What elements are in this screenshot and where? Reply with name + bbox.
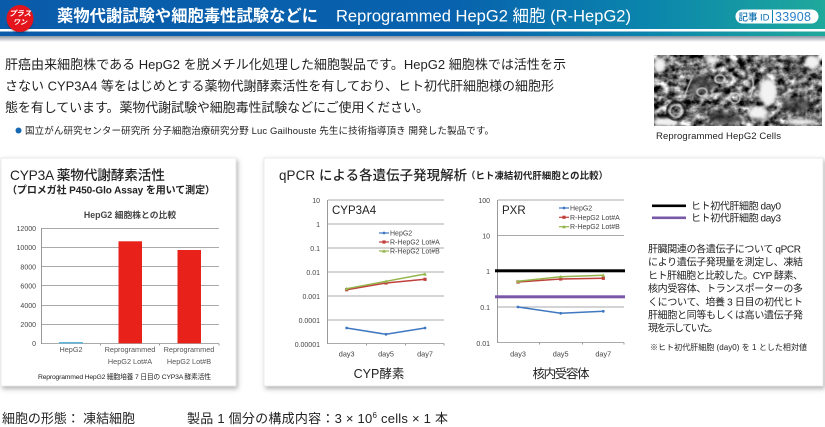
series: Lot A: [518, 278, 603, 282]
explanatory paragraph: 現を示していた。: [648, 323, 718, 335]
line chart: PXR: 10: [482, 234, 490, 240]
line chart: CYP3A4: day5: [378, 350, 394, 358]
bar chart: HepG2 Lot#A: [108, 357, 152, 366]
english title: Reprogrammed HepG2 細胞 (R-HepG2): [336, 6, 631, 26]
line chart: PXR: 0.01: [476, 341, 490, 348]
series: Lot B: [347, 274, 425, 289]
panel subheading: （プロメガ社 P450-Glo Assay を用いて測定）: [7, 184, 215, 196]
reference line: day0: [495, 269, 625, 272]
line chart: PXR: 0.1: [480, 305, 490, 312]
cell form spec: 細胞の形態： 凍結細胞: [2, 411, 135, 426]
legend: HepG2: [390, 230, 412, 238]
line chart: PXR: [476, 198, 625, 381]
article id badge: [736, 10, 818, 24]
bar chart: 8000: [20, 264, 36, 272]
explanatory paragraph: [648, 242, 803, 335]
chart label: CYP3A4: [332, 205, 377, 217]
explanatory paragraph: により遺伝子発現量を測定し、凍結: [648, 256, 803, 269]
bar chart: [17, 209, 219, 366]
intro text: [5, 57, 566, 115]
acknowledgement note: 国立がん研究センター研究所 分子細胞治療研究分野 Luc Gailhouste 先生に技術指導頂き 開発した製品です。: [25, 125, 494, 137]
line chart: PXR: 1: [486, 269, 490, 276]
article id badge: 33908: [775, 10, 811, 24]
explanatory paragraph: くについて、培養 3 日目の初代ヒト: [648, 295, 803, 308]
explanatory paragraph: 肝細胞と同等もしくは高い遺伝子発: [648, 308, 803, 322]
chart title: HepG2 細胞株との比較: [84, 209, 176, 220]
explanatory paragraph: 肝臓関連の各遺伝子について qPCR: [648, 242, 801, 256]
article id badge: 記事 ID: [738, 12, 770, 24]
product contents spec: 製品 1 個分の構成内容：3 × 10: [187, 411, 372, 426]
series: HepG2: [347, 328, 425, 334]
line chart: CYP3A4: 0.0001: [299, 318, 320, 325]
series: HepG2: [518, 307, 603, 313]
reference legend: [652, 200, 781, 224]
bar chart: 0: [32, 341, 36, 348]
chart label: PXR: [502, 205, 526, 217]
bar chart: 4000: [20, 303, 36, 310]
explanatory paragraph: 核内受容体、トランスポーターの多: [648, 282, 803, 295]
legend: R-HepG2 Lot#B: [390, 248, 440, 256]
header banner: [0, 0, 825, 42]
panel heading: qPCR による各遺伝子発現解析: [279, 167, 467, 183]
line chart: CYP3A4: 0.1: [310, 246, 320, 253]
photo caption: Reprogrammed HepG2 Cells: [656, 131, 781, 142]
title: 薬物代謝試験や細胞毒性試験などに: [57, 6, 318, 26]
bar chart: Reprogrammed: [164, 345, 214, 354]
bar chart: 10000: [17, 245, 36, 252]
bar chart: HepG2: [59, 345, 83, 354]
cell photograph: [653, 55, 822, 126]
line chart: CYP3A4: 0.001: [302, 294, 320, 301]
explanatory paragraph: ヒト肝細胞と比較した。CYP 酵素、: [648, 269, 803, 282]
reference legend: ヒト初代肝細胞 day3: [691, 212, 781, 224]
reference line: day3: [495, 295, 625, 298]
bar chart: HepG2 Lot#B: [167, 357, 211, 366]
line chart: CYP3A4: 10: [312, 198, 320, 205]
bar chart: 2000: [20, 322, 36, 329]
series: Lot B: [518, 275, 603, 281]
line chart: CYP3A4: day7: [417, 350, 433, 358]
icon: plus one badge: ワン: [13, 18, 28, 26]
legend: R-HepG2 Lot#A: [570, 215, 620, 222]
legend: [559, 206, 620, 231]
line chart: CYP3A4: 0.00001: [295, 342, 320, 349]
chart caption: CYP酵素: [354, 367, 404, 381]
intro text: 態を有しています。薬物代謝試験や細胞毒性試験などにご使用ください。: [5, 100, 429, 115]
product contents spec: 6: [372, 411, 377, 420]
chart caption: 核内受容体: [532, 367, 590, 381]
line chart: PXR: day7: [595, 350, 611, 358]
panel heading: CYP3A 薬物代謝酵素活性: [10, 168, 165, 183]
line chart: CYP3A4: 0.01: [306, 270, 320, 277]
bar: HepG2: [59, 342, 83, 344]
bar chart: 12000: [17, 226, 36, 233]
bar: Lot B: [178, 250, 201, 343]
series: Lot A: [347, 279, 425, 290]
relative value footnote: ※ヒト初代肝細胞 (day0) を 1 とした相対値: [650, 342, 807, 352]
line chart: PXR: 100: [478, 198, 490, 205]
line chart: PXR: day3: [510, 350, 526, 358]
legend: R-HepG2 Lot#A: [390, 240, 440, 246]
product contents spec: cells × 1 本: [377, 411, 448, 426]
icon: plus one badge: プラス: [9, 9, 32, 18]
chart footnote: Reprogrammed HepG2 細胞培養 7 日目の CYP3A 酵素活性: [38, 372, 211, 381]
legend: [379, 230, 440, 256]
line chart: CYP3A4: 1: [316, 222, 320, 229]
line chart: PXR: day5: [553, 350, 569, 358]
bar: Lot A: [118, 241, 142, 343]
line chart: CYP3A4: [295, 198, 444, 381]
reference legend: ヒト初代肝細胞 day0: [691, 200, 781, 212]
legend: HepG2: [570, 206, 592, 212]
icon: plus one badge: [6, 5, 34, 34]
legend: R-HepG2 Lot#B: [570, 224, 620, 231]
intro text: 肝癌由来細胞株である HepG2 を脱メチル化処理した細胞製品です。HepG2 細胞株では活性を示: [5, 57, 566, 72]
intro text: さない CYP3A4 等をはじめとする薬物代謝酵素活性を有しており、ヒト初代肝細胞様の細胞形: [5, 78, 554, 94]
panel subheading: （ヒト凍結初代肝細胞との比較）: [466, 170, 608, 181]
panel: CYP3A activity: [1, 158, 236, 386]
panel: qPCR analysis: [264, 158, 823, 386]
bar chart: 6000: [20, 284, 36, 290]
line chart: CYP3A4: day3: [339, 350, 355, 358]
bar chart: Reprogrammed: [105, 345, 155, 354]
